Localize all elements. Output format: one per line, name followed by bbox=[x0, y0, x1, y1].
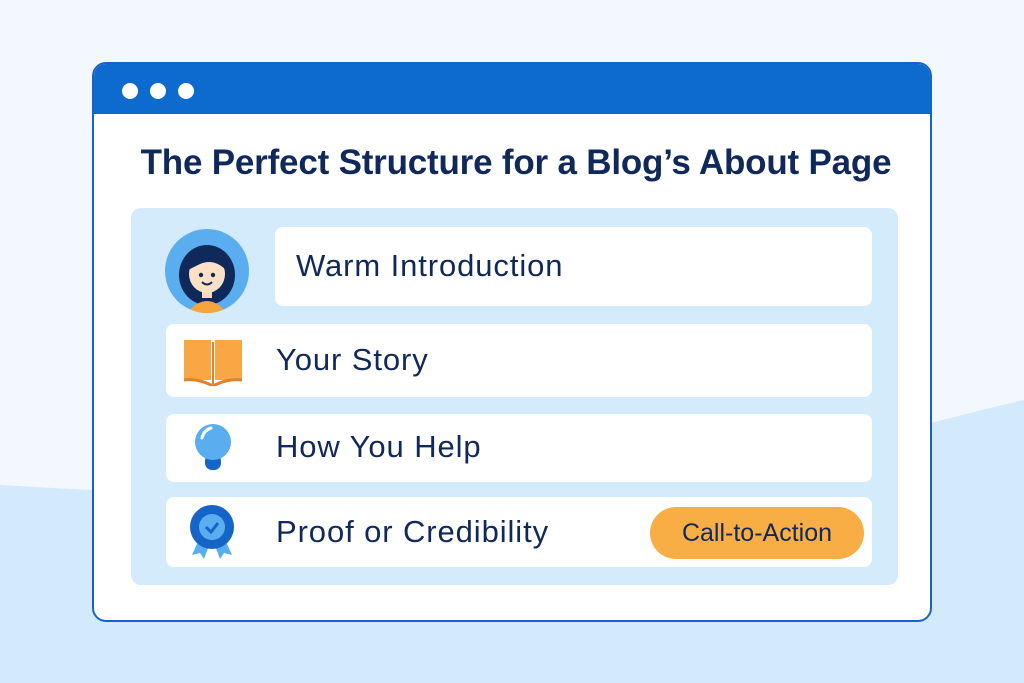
row: warm introduction: Warm Introduction bbox=[296, 248, 563, 283]
row: proof or credibility bbox=[166, 497, 872, 567]
row: how you help bbox=[166, 414, 872, 482]
title: The Perfect Structure for a Blog’s About Page bbox=[141, 143, 891, 182]
icon: badge bbox=[190, 505, 234, 559]
call-to-action button bbox=[650, 507, 864, 559]
row: your story: Your Story bbox=[276, 342, 429, 377]
icon: book bbox=[184, 340, 242, 386]
row: proof or credibility: Proof or Credibility bbox=[276, 514, 549, 549]
window dots bbox=[122, 83, 194, 99]
content panel bbox=[131, 208, 898, 585]
icon: light bulb bbox=[195, 424, 231, 470]
browser window bbox=[92, 62, 932, 622]
row: your story bbox=[166, 324, 872, 397]
row: warm introduction bbox=[275, 227, 872, 306]
avatar icon bbox=[165, 229, 249, 313]
row: how you help: How You Help bbox=[276, 429, 482, 464]
header bar bbox=[94, 64, 930, 114]
call-to-action button: Call-to-Action bbox=[682, 519, 832, 547]
